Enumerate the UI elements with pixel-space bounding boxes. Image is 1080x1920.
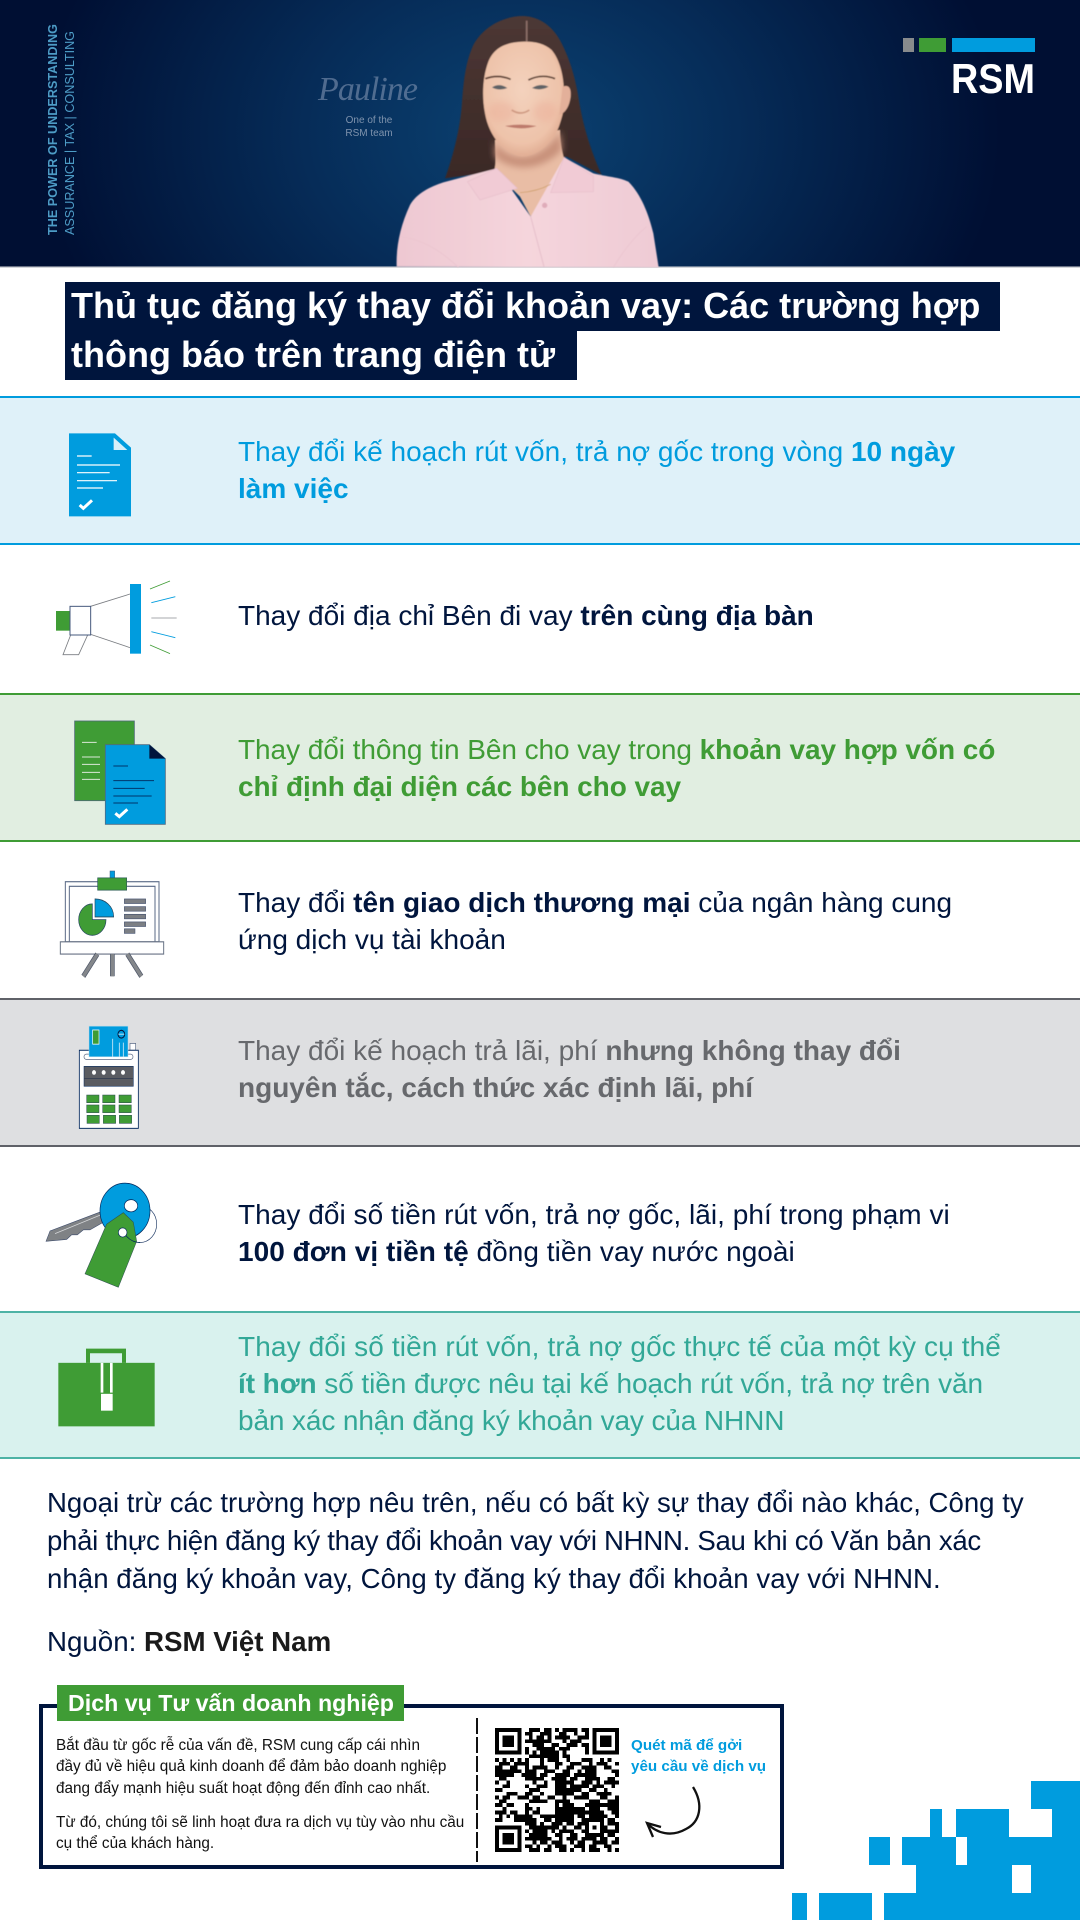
- portrait of woman: [397, 16, 659, 267]
- text: row 7: [238, 1331, 1001, 1436]
- panel: row 6: [46, 1182, 950, 1288]
- title: Thủ tục đăng ký thay đổi khoản vay: Các trường hợp: [71, 285, 980, 326]
- service text 2: Từ đó, chúng tôi sẽ linh hoạt đưa ra dịch vụ tùy vào nhu cầu: [56, 1814, 464, 1831]
- service text 1: đầy đủ về hiệu quả kinh doanh để đảm bảo doanh nghiệp: [56, 1758, 446, 1775]
- service text 2: cụ thể của khách hàng.: [56, 1835, 214, 1852]
- source: Nguồn: RSM Việt Nam: [47, 1626, 331, 1657]
- QR code: [495, 1728, 619, 1852]
- vertical tagline: THE POWER OF UNDERSTANDING: [45, 24, 60, 235]
- text: row 5: [238, 1035, 901, 1103]
- icon: briefcase: [58, 1348, 155, 1426]
- panel: row 7: [0, 1311, 1080, 1459]
- dashed divider: [476, 1718, 478, 1862]
- service text 1: Bắt đầu từ gốc rễ của vấn đề, RSM cung cấp cái nhìn: [56, 1737, 420, 1754]
- signature: Pauline: [317, 71, 418, 108]
- text: row 5: nguyên tắc, cách thức xác định lãi, phí: [238, 1072, 753, 1103]
- service text 1: [56, 1736, 446, 1797]
- vertical tagline: ASSURANCE | TAX | CONSULTING: [62, 31, 77, 235]
- decorative pixel blocks: [792, 1781, 1080, 1920]
- paragraph: note: Ngoại trừ các trường hợp nêu trên, nếu có bất kỳ sự thay đổi nào khác, Công ty: [47, 1487, 1024, 1518]
- text: row 7: bản xác nhận đăng ký khoản vay của NHNN: [238, 1405, 784, 1436]
- text: row 1: [238, 436, 955, 504]
- icon: two documents: [74, 720, 166, 825]
- service box heading: [57, 1685, 404, 1721]
- signature: One of the: [346, 115, 393, 126]
- text: row 6: Thay đổi số tiền rút vốn, trả nợ gốc, lãi, phí trong phạm vi: [238, 1199, 950, 1230]
- title: thông báo trên trang điện tử: [71, 334, 555, 375]
- arrow to QR: [645, 1786, 700, 1838]
- RSM logo: [903, 38, 1035, 102]
- text: row 7: ít hơn số tiền được nêu tại kế hoạch rút vốn, trả nợ trên văn: [238, 1368, 983, 1399]
- service text 2: [56, 1814, 464, 1852]
- text: row 1: làm việc: [238, 473, 349, 504]
- icon: document: [69, 433, 131, 516]
- panel: row 3: [0, 693, 1080, 842]
- paragraph: note: nhận đăng ký khoản vay, Công ty đăng ký thay đổi khoản vay với NHNN.: [47, 1563, 941, 1594]
- text: row 6: 100 đơn vị tiền tệ đồng tiền vay nước ngoài: [238, 1236, 795, 1267]
- RSM logo: RSM: [951, 55, 1035, 102]
- text: row 5: Thay đổi kế hoạch trả lãi, phí nhưng không thay đổi: [238, 1035, 901, 1066]
- icon: megaphone: [56, 580, 177, 656]
- text: row 3: [238, 734, 995, 802]
- panel: row 4: [60, 870, 952, 978]
- panel: row 1: [0, 396, 1080, 545]
- QR caption: yêu cầu về dịch vụ: [631, 1758, 766, 1775]
- QR caption: Quét mã để gởi: [631, 1737, 742, 1754]
- panel: row 2: [56, 580, 814, 656]
- text: row 2: Thay đổi địa chỉ Bên đi vay trên cùng địa bàn: [238, 600, 814, 631]
- panel: service box: [39, 1704, 784, 1869]
- panel: row 5: [0, 998, 1080, 1147]
- signature: RSM team: [345, 128, 393, 139]
- service box heading: Dịch vụ Tư vấn doanh nghiệp: [68, 1690, 394, 1716]
- service text 1: đang đẩy mạnh hiệu suất hoạt động đến đỉnh cao nhất.: [56, 1780, 430, 1797]
- paragraph: note: [47, 1487, 1024, 1594]
- text: row 4: Thay đổi tên giao dịch thương mại của ngân hàng cung: [238, 887, 952, 918]
- text: row 7: Thay đổi số tiền rút vốn, trả nợ gốc thực tế của một kỳ cụ thể: [238, 1331, 1001, 1362]
- header banner with portrait: [0, 0, 1080, 268]
- text: row 3: chỉ định đại diện các bên cho vay: [238, 771, 681, 802]
- signature: [317, 71, 418, 139]
- text: row 1: Thay đổi kế hoạch rút vốn, trả nợ gốc trong vòng 10 ngày: [238, 436, 955, 467]
- icon: card terminal: [78, 1026, 139, 1129]
- vertical tagline: [45, 24, 77, 235]
- text: row 4: [238, 887, 952, 955]
- text: row 3: Thay đổi thông tin Bên cho vay trong khoản vay hợp vốn có: [238, 734, 995, 765]
- paragraph: note: phải thực hiện đăng ký thay đổi khoản vay với NHNN. Sau khi có Văn bản xác: [47, 1525, 981, 1556]
- title: [65, 282, 1000, 380]
- text: row 6: [238, 1199, 950, 1267]
- icon: keys with tag: [46, 1182, 157, 1288]
- icon: presentation board: [60, 870, 164, 978]
- QR caption: [631, 1737, 766, 1775]
- text: row 4: ứng dịch vụ tài khoản: [238, 924, 506, 955]
